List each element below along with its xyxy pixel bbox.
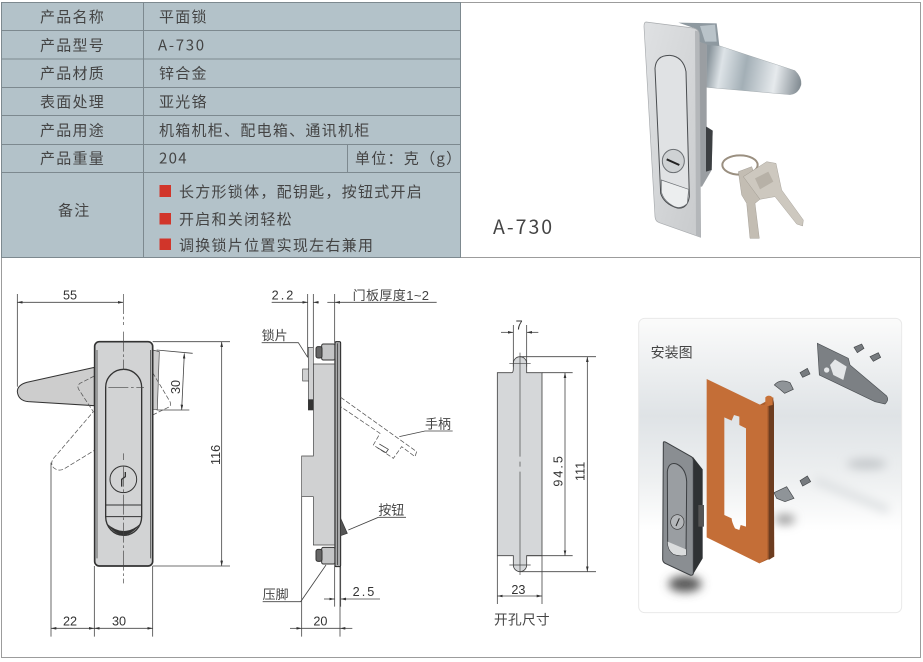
photo: keys [722,155,803,238]
label: lock plate: 锁片 [262,328,288,343]
drawing: side view [262,288,453,637]
photo: key cylinder [662,149,684,173]
row: model: 产品型号 [40,34,105,55]
row: material: 产品材质 [40,63,105,84]
key cylinder [110,466,137,493]
lock body [663,442,704,575]
row: usage: 产品用途 [40,119,105,140]
button [341,518,347,536]
panel: installation diagram [639,318,902,613]
dimension: 7: 7 [516,318,523,332]
row: weight [40,148,462,169]
row: remarks: 备注 [58,199,91,220]
dimension: 23: 23 [511,583,525,597]
label: handle [399,417,453,437]
lock plate [303,347,313,410]
label: button [348,503,406,530]
row: model: A-730 [158,34,206,55]
dimension: 94.5 [527,373,573,556]
row: remarks: 调换锁片位置实现左右兼用 [179,234,374,255]
dimension: 2.2 and door thickness: 门板厚度1~2 [353,288,429,303]
dimension: 30 angle [157,350,193,410]
panel background [639,318,902,613]
photo: lock body side [699,42,713,187]
label: foot [263,565,326,602]
caption: 开孔尺寸 [494,612,550,627]
label: handle: 手柄 [425,417,451,432]
center lines [509,353,531,575]
center lines [108,294,144,583]
handle [17,367,94,406]
row: product name: 产品名称 [40,6,105,27]
dimension: 22 and 30 [51,463,153,637]
dimension: 2.2 and door thickness [272,288,437,607]
clips [774,381,794,502]
dimension: 2.2 and door thickness: 2.2 [272,288,295,302]
row: remarks [58,181,423,255]
dimension: 55: 55 [63,288,77,302]
row: product name: 平面锁 [159,6,208,27]
dimension: 22 and 30: 30 [112,614,126,628]
label: lock plate [262,328,308,357]
row: remarks: 开启和关闭轻松 [179,209,293,230]
row: remarks: 长方形锁体，配钥匙，按钮式开启 [179,181,423,202]
body [302,364,335,545]
row: usage [40,119,371,140]
dimension: 2.5: 2.5 [353,585,376,599]
product photo [644,22,803,238]
dimension: 22 and 30: 22 [63,614,77,628]
dimension: 2.5 [324,567,380,607]
row: usage: 机箱机柜、配电箱、通讯机柜 [159,119,371,140]
dimension: 116 [153,342,230,566]
dimension: 111 [520,357,596,572]
row: surface treatment [40,91,208,112]
model label: A-730 [493,211,554,240]
dashed handle [341,397,417,458]
dimension: 30 angle: 30 [169,380,183,394]
row: model [40,34,206,55]
dashed handle positions [52,373,171,470]
photo: handle [707,43,801,95]
row: weight: 单位：克（g） [355,148,462,169]
orange door panel [707,379,774,563]
label: button: 按钮 [378,503,404,518]
handle plate [817,343,888,404]
dimension: 94.5: 94.5 [552,454,566,487]
row: surface treatment: 亚光铬 [159,91,208,112]
row: surface treatment: 表面处理 [40,91,105,112]
screws [316,344,335,564]
cutout shape [497,357,542,572]
photo: push button [655,55,689,208]
push button outline [106,369,142,535]
label: foot: 压脚 [263,587,289,602]
screws [800,344,881,486]
row: material: 锌合金 [159,63,208,84]
door plate [335,342,341,567]
row: weight: 产品重量 [40,148,105,169]
dimension: 7 [501,318,538,367]
row: weight: 204 [159,148,188,169]
dimension: 20 [290,497,352,637]
row: product name [40,6,208,27]
drawing: cutout [494,318,596,627]
floor shadows [668,459,890,592]
lock body [95,342,153,566]
dimension: 111: 111 [574,462,588,481]
dimension: 55 [17,288,123,387]
row: material [40,63,208,84]
dimension: 20: 20 [313,614,327,628]
dimension: 23 [497,556,542,604]
drawing: front view [17,288,230,637]
spec table [1,2,462,258]
heading: 安装图 [651,345,693,361]
dimension: 116: 116 [209,445,223,465]
photo: face plate [644,22,701,237]
